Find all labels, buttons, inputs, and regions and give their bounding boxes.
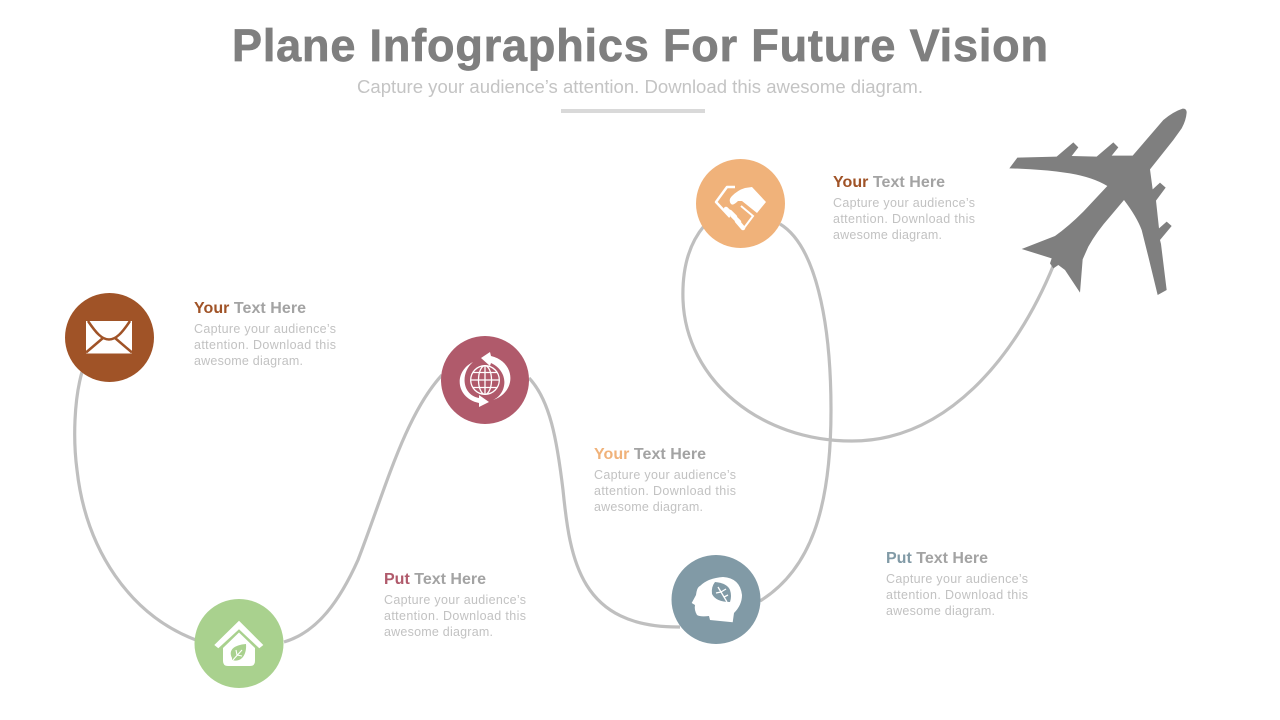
step 1: mail icon [65,293,154,382]
text block 4: Put Text Here [886,550,988,567]
step 2: home icon [194,599,284,688]
text block 1: awesome diagram. [194,354,303,368]
text block 2 [384,571,526,639]
step 4: head icon [672,555,760,644]
text block 1: attention. Download this [194,338,336,352]
text block 3: Your Text Here [594,446,706,463]
text block 5: Your Text Here [833,174,945,191]
flight path [75,224,1054,642]
text block 4 [886,550,1028,618]
text block 5 [833,174,975,242]
text block 5: awesome diagram. [833,228,942,242]
title underline [561,109,705,113]
text block 2: awesome diagram. [384,625,493,639]
text block 5: Capture your audience’s [833,196,975,210]
text block 3: Capture your audience’s [594,468,736,482]
step 5: handshake icon [696,159,785,248]
text block 4: awesome diagram. [886,604,995,618]
text block 2: Capture your audience’s [384,593,526,607]
subtitle: Capture your audience’s attention. Download this awesome diagram. [357,76,923,97]
text block 4: attention. Download this [886,588,1028,602]
step 3: globe icon [441,336,529,424]
text block 1: Your Text Here [194,300,306,317]
text block 2: Put Text Here [384,571,486,588]
text block 3: awesome diagram. [594,500,703,514]
text block 2: attention. Download this [384,609,526,623]
text block 4: Capture your audience’s [886,572,1028,586]
text block 3: attention. Download this [594,484,736,498]
text block 1: Capture your audience’s [194,322,336,336]
title: Plane Infographics For Future Vision [232,20,1048,71]
text block 3 [594,446,736,514]
text block 5: attention. Download this [833,212,975,226]
airplane [1009,109,1187,295]
text block 1 [194,300,336,368]
